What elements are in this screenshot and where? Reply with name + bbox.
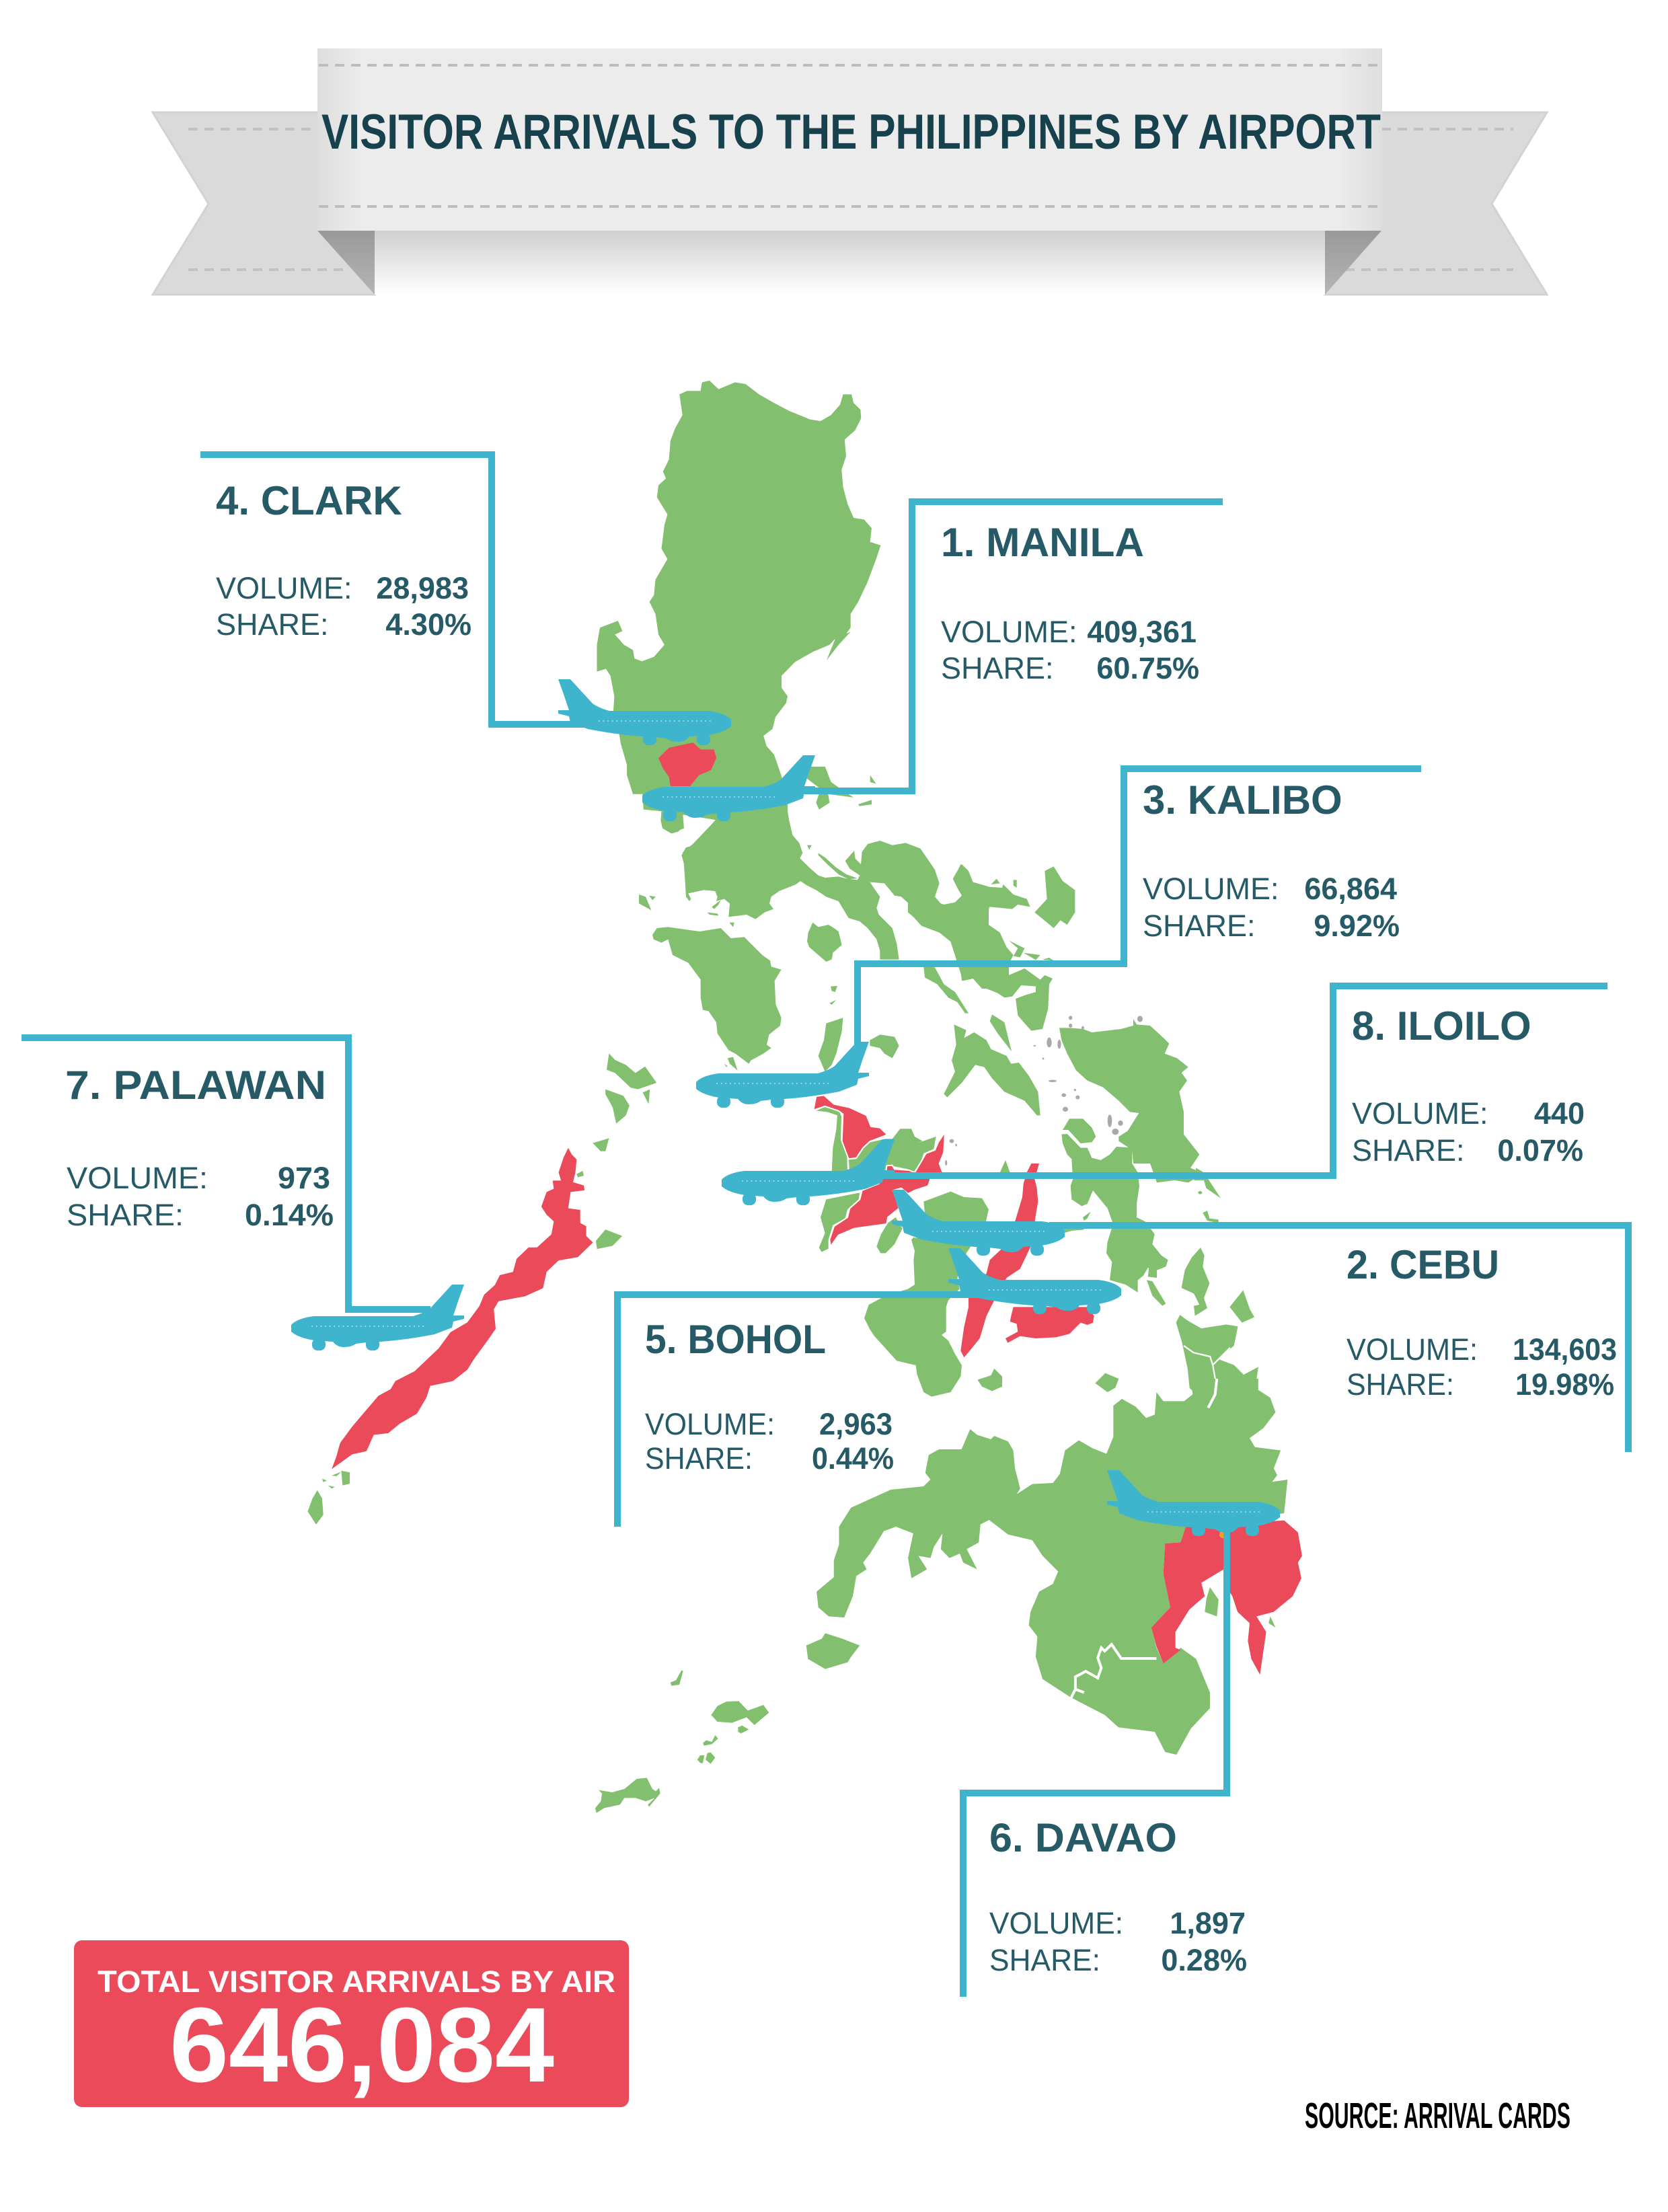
region: southern Tagalog and Mindoro [639, 807, 989, 1071]
region: Iloilo [829, 1132, 945, 1246]
callout: 3. Kalibo: SHARE: [1143, 909, 1256, 943]
callout: 8. Iloilo [874, 986, 1607, 1176]
callout: 7. Palawan: 0.14% [245, 1198, 334, 1232]
callout: 4. Clark: VOLUME: [216, 571, 352, 605]
callout: 8. Iloilo: 440 [1534, 1096, 1585, 1131]
callout: 2. Cebu [1049, 1225, 1628, 1452]
callout: 2. Cebu: SHARE: [1347, 1367, 1454, 1402]
callout: 5. Bohol: SHARE: [645, 1441, 753, 1476]
callout: 7. Palawan: VOLUME: [67, 1161, 208, 1195]
callout: 5. Bohol [617, 1295, 1009, 1527]
total arrivals box [74, 1940, 629, 2107]
title banner [153, 48, 1547, 295]
region: Bicol and Masbate [908, 847, 1143, 1135]
callout: 5. Bohol: VOLUME: [645, 1407, 775, 1441]
region: Sulu archipelago [595, 1670, 769, 1813]
callout: 4. Clark: SHARE: [216, 607, 329, 642]
callout: 8. Iloilo: VOLUME: [1352, 1096, 1488, 1131]
callout: 5. Bohol: 0.44% [812, 1441, 894, 1476]
icon: plane Kalibo [696, 1042, 869, 1108]
region: Davao [1151, 1521, 1302, 1675]
region: Cebu [960, 1164, 1039, 1357]
callout: 1. Manila: 60.75% [1096, 651, 1199, 685]
callout: 7. Palawan: 973 [278, 1161, 330, 1195]
callout: 8. Iloilo: 0.07% [1497, 1133, 1583, 1168]
region: Clark (Pampanga) [658, 742, 716, 786]
callout: 1. Manila [804, 502, 1223, 791]
callout: 2. Cebu: 19.98% [1515, 1367, 1614, 1402]
callout: 5. Bohol: 2,963 [819, 1407, 893, 1441]
callout: 8. Iloilo: 8. ILOILO [1352, 1003, 1531, 1048]
banner right tail [1325, 112, 1547, 295]
banner right fold [1325, 231, 1381, 295]
callout: 4. Clark: 28,983 [376, 571, 469, 605]
banner left fold [317, 231, 375, 295]
callout: 6. Davao: 6. DAVAO [989, 1815, 1177, 1860]
callout: 7. Palawan: SHARE: [67, 1198, 184, 1232]
region: Palawan [307, 1053, 656, 1525]
callout: 1. Manila: 1. MANILA [941, 520, 1144, 565]
callout: 2. Cebu: 2. CEBU [1347, 1242, 1499, 1287]
total label: TOTAL VISITOR ARRIVALS BY AIR [98, 1965, 615, 1999]
callout: 6. Davao: SHARE: [989, 1943, 1100, 1977]
callout: 1. Manila: SHARE: [941, 651, 1054, 685]
callout: 6. Davao: VOLUME: [989, 1906, 1123, 1940]
banner left tail [153, 112, 375, 295]
total number: 646,084 [169, 1986, 554, 2104]
region: northern Luzon [597, 381, 880, 854]
callout: 2. Cebu: VOLUME: [1347, 1332, 1478, 1367]
icon: plane Bohol [948, 1248, 1121, 1314]
callout: 3. Kalibo: 66,864 [1304, 872, 1397, 906]
region: Bohol [1006, 1307, 1094, 1343]
region: Mindanao [806, 1379, 1302, 1755]
banner shadow [375, 231, 1325, 295]
title text: VISITOR ARRIVALS TO THE PHILIPPINES BY AIRPORT [321, 105, 1381, 159]
callout: 3. Kalibo: 3. KALIBO [1143, 777, 1342, 823]
callout: 4. Clark [200, 455, 592, 724]
callout: 1. Manila: VOLUME: [941, 615, 1077, 649]
region: western Visayas [813, 1095, 1119, 1397]
icon: plane Iloilo [722, 1139, 895, 1205]
banner main panel [317, 48, 1382, 231]
region: Samar and Leyte [1059, 1019, 1254, 1323]
icon: plane Palawan [291, 1285, 464, 1350]
callout: 6. Davao [963, 1527, 1247, 1997]
callout: 5. Bohol: 5. BOHOL [645, 1317, 826, 1362]
callout: 7. Palawan: 7. PALAWAN [65, 1063, 326, 1108]
callout: 1. Manila: 409,361 [1087, 615, 1197, 649]
callout: 6. Davao: 1,897 [1170, 1906, 1246, 1940]
callout: 4. Clark: 4. CLARK [216, 478, 402, 523]
icon: plane Manila [642, 755, 815, 821]
callout: 8. Iloilo: SHARE: [1352, 1133, 1465, 1168]
region: northern Mindanao tip [1176, 1315, 1267, 1400]
region: Kalibo / Aklan [813, 1095, 887, 1159]
icon: plane Clark [558, 679, 731, 745]
callout: 3. Kalibo [858, 769, 1421, 1049]
callout: 7. Palawan [22, 1038, 430, 1309]
callout: 2. Cebu: 134,603 [1513, 1332, 1617, 1367]
small grey islets [1033, 1016, 1143, 1135]
icon: plane Cebu [892, 1190, 1065, 1256]
callout: 4. Clark: 4.30% [385, 607, 471, 642]
callout: 3. Kalibo: 9.92% [1314, 909, 1400, 943]
callout: 3. Kalibo: VOLUME: [1143, 872, 1279, 906]
map of the Philippines [307, 381, 1302, 1813]
callout: 6. Davao: 0.28% [1161, 1943, 1247, 1977]
icon: plane Davao [1107, 1470, 1280, 1536]
